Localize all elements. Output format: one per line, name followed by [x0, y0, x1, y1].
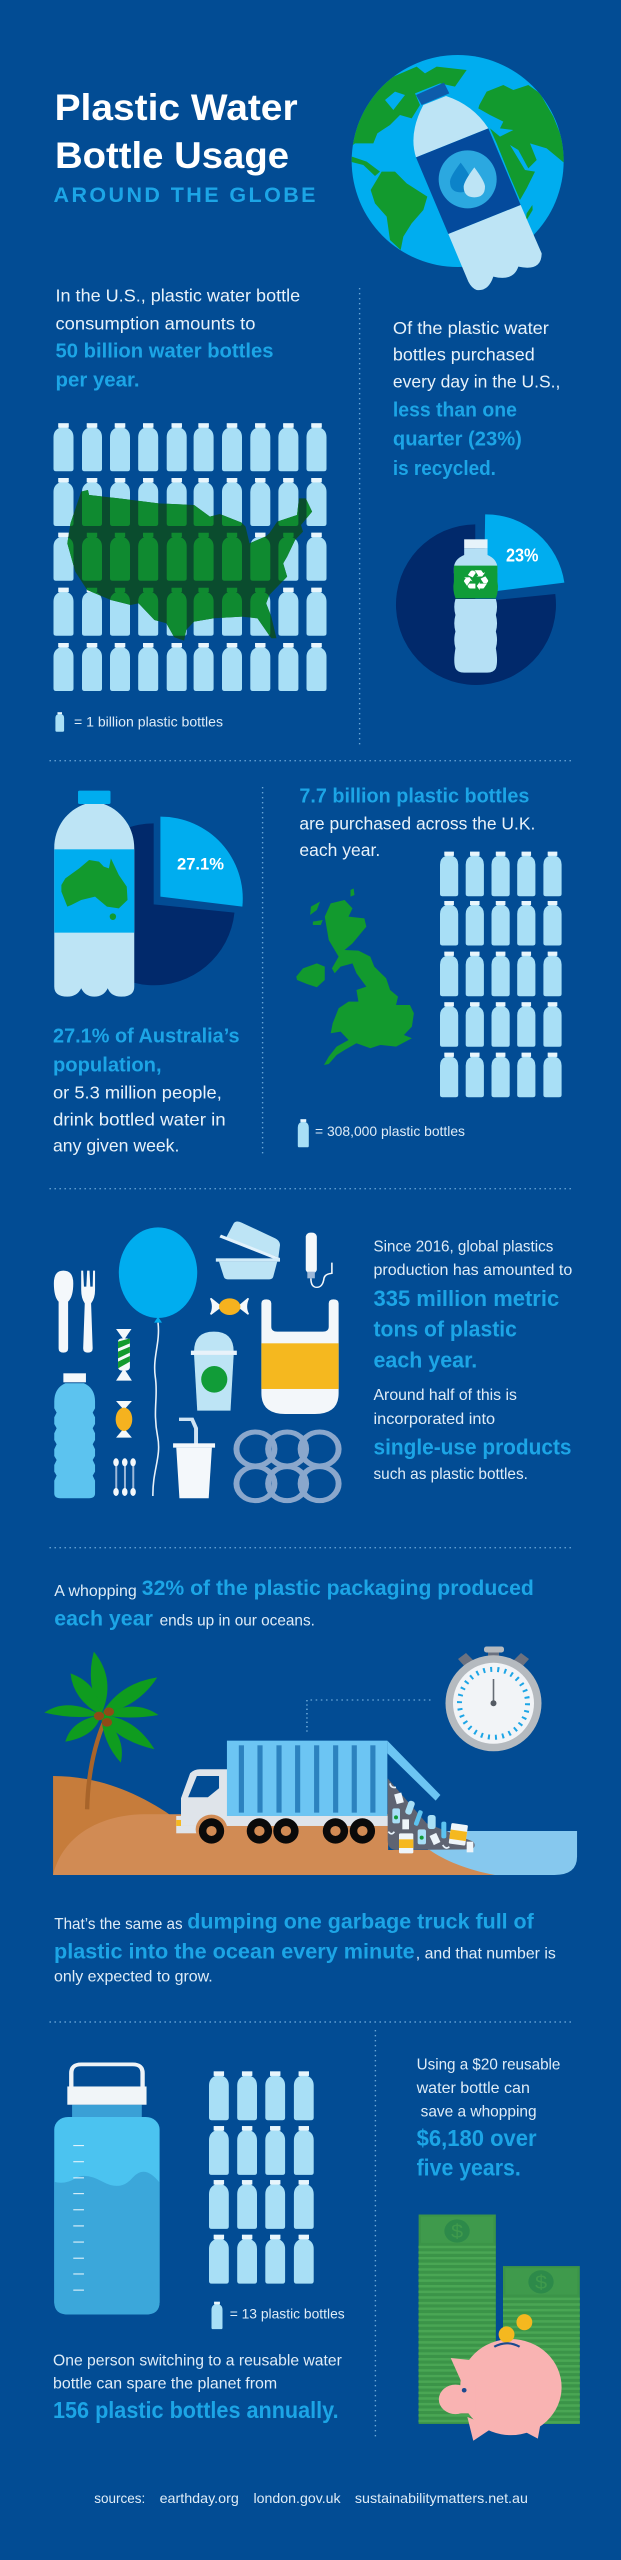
- text: 32% in oceans: 32% of the plastic packaging produced: [142, 1577, 534, 1600]
- icon: fork: [81, 1271, 95, 1353]
- icon: striped candy: [116, 1329, 132, 1381]
- map: United Kingdom: [296, 888, 414, 1065]
- text: garbage truck comparison: plastic into the ocean every minute: [54, 1940, 415, 1963]
- text: 32% in oceans: A whopping: [54, 1583, 137, 1600]
- legend: 13 bottles: = 13 plastic bottles: [230, 2306, 345, 2322]
- icon: orange candy: [211, 1298, 248, 1315]
- text: savings: Using a $20 reusable: [417, 2057, 560, 2074]
- text: global plastics: Around half of this is: [374, 1387, 517, 1404]
- icon: tampon: [306, 1233, 332, 1287]
- text: Australia: [53, 1025, 240, 1156]
- text: global plastics: 335 million metric: [374, 1286, 559, 1311]
- text: U.S. recycling: bottles purchased: [393, 345, 535, 365]
- text: Australia: or 5.3 million people,: [53, 1082, 222, 1102]
- icon: short money stack: $: [535, 2272, 548, 2294]
- pie chart: 23% recycled: [396, 514, 564, 685]
- sources: london.gov.uk: [254, 2490, 342, 2506]
- illustration: garbage truck on the beach: [44, 1652, 577, 1875]
- icon: globe with plastic bottle: [350, 55, 567, 290]
- chart: Australia bottle and pie: [54, 791, 243, 997]
- subtitle: AROUND THE GLOBE: [54, 183, 316, 207]
- icon: stopwatch: [446, 1646, 542, 1751]
- text: global plastics: each year.: [374, 1348, 477, 1373]
- text: global plastics: production has amounted to: [374, 1262, 572, 1279]
- text: switching to reusable: 156 plastic bottles annually.: [53, 2397, 339, 2423]
- text: global plastics: such as plastic bottles.: [374, 1466, 528, 1483]
- icon: piggy bank: [439, 2314, 562, 2441]
- text: U.S. recycling: every day in the U.S.,: [393, 372, 560, 392]
- text: savings: [416, 2057, 560, 2181]
- text: savings: $6,180 over: [417, 2125, 537, 2151]
- text: U.S. consumption: consumption amounts to: [56, 313, 256, 333]
- text: garbage truck comparison: , and that number is: [416, 1945, 556, 1962]
- icon: cup with straw: [173, 1419, 215, 1498]
- text: U.K. purchases: each year.: [299, 840, 380, 860]
- text: savings: five years.: [417, 2155, 521, 2181]
- back hill: [53, 1776, 198, 1875]
- text: savings: save a whopping: [421, 2104, 537, 2121]
- text: Australia: 27.1% of Australia’s: [53, 1025, 240, 1047]
- text: U.K. purchases: [299, 785, 535, 860]
- icon: balloon: [119, 1227, 197, 1496]
- icon: garbage truck: [176, 1741, 440, 1844]
- front sand: [53, 1814, 495, 1875]
- text: switching to reusable: One person switching to a reusable water: [53, 2352, 342, 2369]
- icon: takeaway container: [216, 1221, 280, 1279]
- text: 32% in oceans: ends up in our oceans.: [160, 1613, 315, 1630]
- icon: six-pack rings: [236, 1432, 339, 1501]
- text: U.S. consumption: per year.: [56, 370, 140, 392]
- text: Australia: any given week.: [53, 1136, 179, 1156]
- text: switching to reusable: bottle can spare the planet from: [53, 2376, 277, 2392]
- icon: yellow candy: [116, 1401, 132, 1438]
- text: U.S. consumption: 50 billion water bottles: [56, 341, 274, 363]
- text: U.S. recycling: [393, 318, 560, 480]
- coin 1: [499, 2326, 514, 2343]
- map: United States: [67, 490, 312, 641]
- icon: tall money stack: [419, 2215, 496, 2424]
- text: global plastics: tons of plastic: [374, 1317, 517, 1342]
- illustration: single-use plastic items: [54, 1221, 339, 1501]
- pictogram: 25 U.K. bottles: [440, 852, 562, 1097]
- icon: palm tree: [44, 1652, 158, 1809]
- icon: plastic bag: [261, 1299, 339, 1414]
- water: [428, 1831, 577, 1875]
- text: garbage truck comparison: [54, 1910, 556, 1986]
- legend: 308,000 bottles: = 308,000 plastic bottles: [315, 1123, 465, 1139]
- sources: sustainabilitymatters.net.au: [355, 2490, 528, 2506]
- pie chart: 23% recycled: 23%: [506, 546, 538, 566]
- text: U.S. consumption: [56, 286, 300, 392]
- icon: short money stack: [503, 2266, 580, 2424]
- legend: 13 bottles: [212, 2302, 345, 2329]
- icon: recycling bottle: [453, 539, 498, 673]
- illustration: money stacks and piggy bank: [419, 2215, 580, 2441]
- text: global plastics: Since 2016, global plastics: [374, 1239, 553, 1256]
- icon: reusable water bottle: [54, 2064, 160, 2314]
- text: U.S. recycling: is recycled.: [393, 458, 496, 480]
- icon: recycling bottle: ♻: [461, 564, 491, 597]
- text: global plastics: single-use products: [374, 1434, 572, 1459]
- icon: cotton swabs: [113, 1458, 136, 1496]
- text: garbage truck comparison: dumping one garbage truck full of: [187, 1910, 535, 1933]
- map: Australia: [61, 858, 128, 920]
- text: U.S. recycling: Of the plastic water: [393, 318, 549, 338]
- legend: 1 billion bottles: = 1 billion plastic bottles: [74, 714, 223, 730]
- text: 32% in oceans: [54, 1577, 534, 1631]
- sources: sources:: [94, 2490, 145, 2506]
- text: global plastics: incorporated into: [374, 1411, 495, 1428]
- icon: domed cup: [191, 1332, 237, 1411]
- text: savings: water bottle can: [416, 2080, 530, 2097]
- coin 2: [516, 2314, 532, 2330]
- text: U.S. recycling: quarter (23%): [393, 429, 522, 451]
- text: switching to reusable: [53, 2352, 342, 2423]
- text: garbage truck comparison: only expected to grow.: [54, 1969, 213, 1986]
- text: U.S. consumption: In the U.S., plastic water bottle: [56, 286, 300, 306]
- dotted connector: [307, 1700, 434, 1732]
- chart: Australia bottle and pie: 27.1%: [177, 854, 224, 873]
- title block: [54, 87, 316, 207]
- icon: tall money stack: $: [451, 2221, 464, 2243]
- icon: ribbed bottle: [54, 1373, 95, 1498]
- legend: 308,000 bottles: [298, 1119, 465, 1147]
- text: U.K. purchases: are purchased across the U.K.: [299, 813, 535, 833]
- plastic waste pile: [388, 1778, 475, 1853]
- text: garbage truck comparison: That’s the same as: [54, 1916, 183, 1933]
- sources: earthday.org: [160, 2490, 239, 2506]
- text: 32% in oceans: each year: [54, 1608, 153, 1631]
- text: global plastics: [374, 1239, 572, 1483]
- text: U.K. purchases: 7.7 billion plastic bottles: [299, 785, 529, 807]
- sources: [94, 2490, 528, 2506]
- pictogram: 16 bottles: [209, 2071, 314, 2284]
- pictogram: 50 bottles over U.S. map: [54, 423, 326, 691]
- title line 1: Plastic Water: [55, 87, 298, 128]
- text: Australia: population,: [53, 1055, 162, 1077]
- title line 2: Bottle Usage: [55, 135, 289, 176]
- text: U.S. recycling: less than one: [393, 400, 517, 422]
- text: Australia: drink bottled water in: [53, 1110, 226, 1130]
- icon: spoon: [54, 1271, 73, 1353]
